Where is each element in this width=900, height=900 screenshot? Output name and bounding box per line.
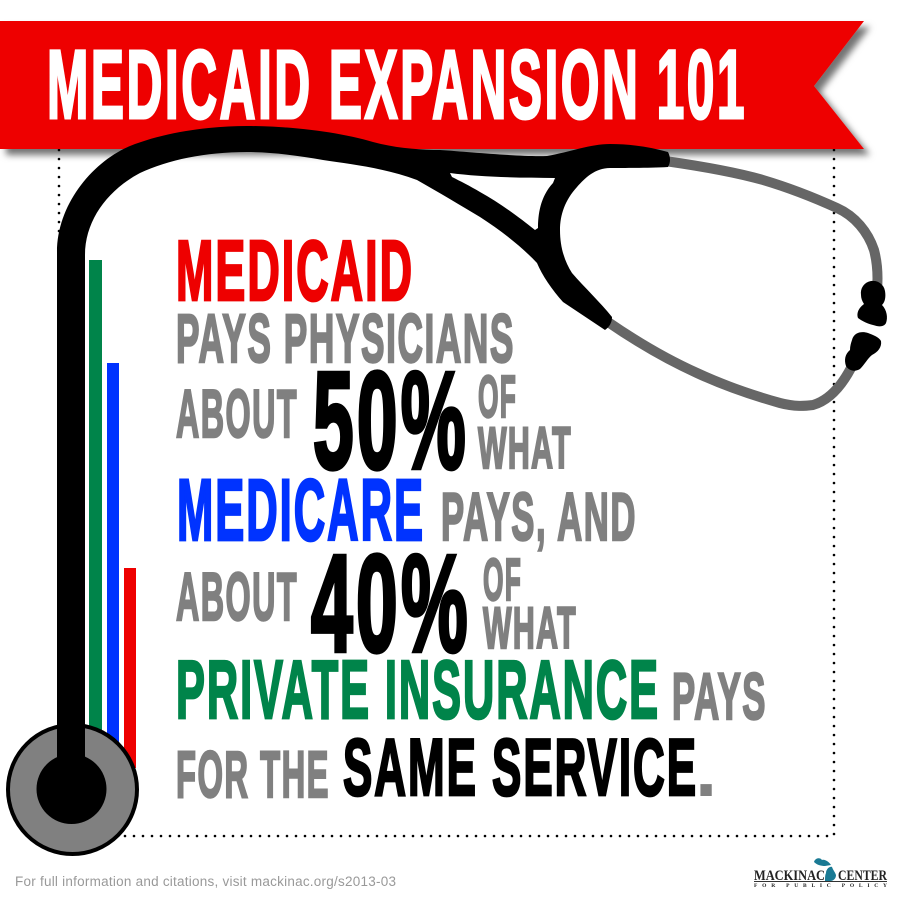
bar chart: payment comparison bars — [89, 260, 136, 768]
main statement text: FOR THE — [176, 737, 330, 811]
logo name: MACKINAC — [754, 868, 825, 884]
main statement text: ABOUT — [176, 376, 298, 452]
statistic: 40%: 40% — [311, 527, 471, 681]
main statement text: ABOUT — [176, 559, 298, 635]
main statement text: OF — [478, 364, 517, 430]
text: what: WHAT — [478, 416, 572, 481]
footer citation: For full information and citations, visit mackinac.org/s2013-03 — [15, 874, 396, 889]
text: pays physicians: PAYS PHYSICIANS — [176, 300, 515, 377]
main statement text — [176, 224, 767, 813]
text: pays, and: PAYS, AND — [441, 479, 637, 555]
icon: stethoscope — [8, 126, 887, 854]
logo: Mackinac Center for Public Policy — [754, 858, 887, 889]
logo: Mackinac Center for Public Policy: CENTER — [838, 868, 887, 884]
stethoscope upper earpiece — [857, 281, 887, 326]
stethoscope chest piece — [8, 700, 137, 854]
icon: Michigan map — [814, 858, 836, 881]
main statement text: OF — [483, 547, 522, 613]
text: pays: PAYS — [672, 659, 767, 733]
statistic: 50%: 50% — [313, 344, 469, 498]
logo tagline: FOR PUBLIC POLICY — [754, 883, 887, 889]
stethoscope lower earpiece — [845, 332, 881, 371]
heading: Medicaid: MEDICAID — [176, 224, 414, 319]
heading: Medicare: MEDICARE — [177, 462, 425, 559]
red title banner — [0, 21, 864, 149]
text: what: WHAT — [483, 596, 577, 661]
stethoscope black tubing — [57, 126, 670, 770]
stethoscope gray tubes — [608, 161, 878, 406]
text: period: . — [695, 724, 717, 813]
